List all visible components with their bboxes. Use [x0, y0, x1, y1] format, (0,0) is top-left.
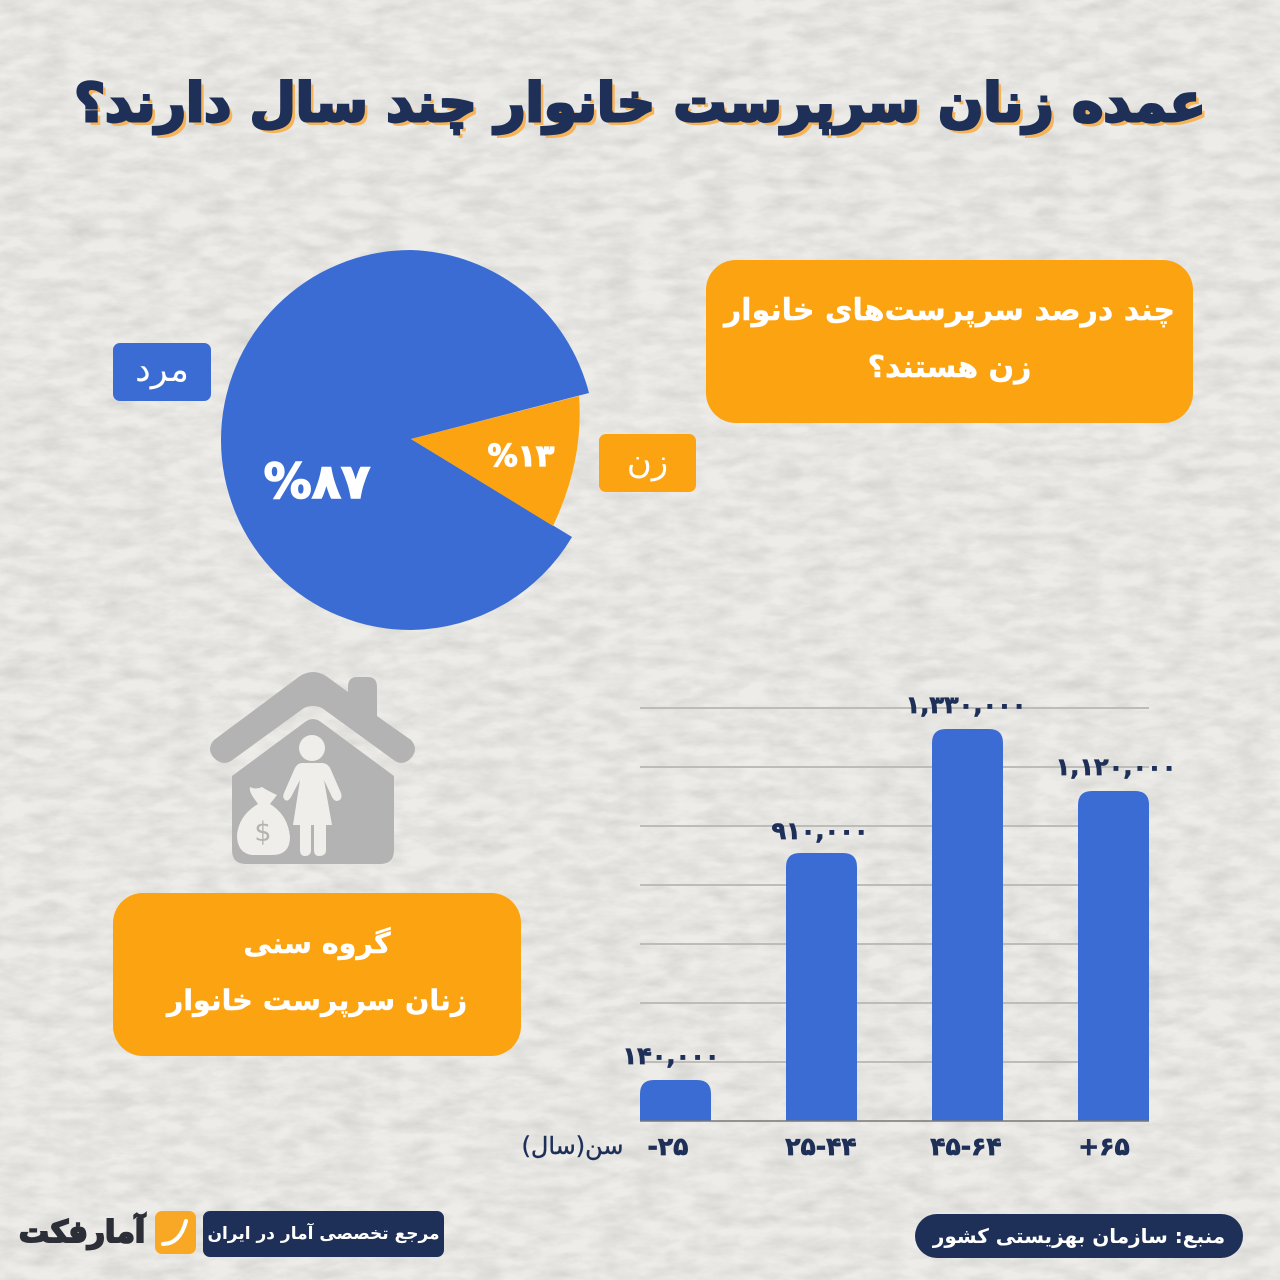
- tagline badge: مرجع تخصصی آمار در ایران: [207, 1224, 440, 1244]
- logo wordmark: آمارفکت: [19, 1215, 145, 1250]
- title: عمده زنان سرپرست خانوار چند سال دارند؟: [74, 73, 1206, 134]
- bar: 25-44: [786, 853, 857, 1121]
- bar chart: age groups: [640, 707, 1149, 1122]
- callout: age group: [113, 893, 521, 1056]
- value label: 140,000: ۱۴۰,۰۰۰: [622, 1042, 720, 1070]
- bar: 65+: [1078, 791, 1149, 1121]
- pie chart: share of household heads: [221, 250, 589, 630]
- tagline badge: [203, 1211, 444, 1257]
- source badge: [915, 1214, 1243, 1258]
- callout: share of female heads: چند درصد سرپرست‌های خانوار: [724, 292, 1175, 328]
- axis title: age in years: سن(سال): [522, 1132, 623, 1160]
- icon: house with woman and money bag: [210, 672, 415, 864]
- icon: house with woman and money bag: $: [254, 817, 272, 848]
- axis label: 25-44: ۲۵-۴۴: [785, 1132, 857, 1161]
- axis label: under 25: -۲۵: [648, 1132, 688, 1161]
- axis label: 45-64: ۴۵-۶۴: [930, 1132, 1002, 1161]
- bar: under 25: [640, 1080, 711, 1121]
- value label: 910,000: ۹۱۰,۰۰۰: [771, 817, 868, 845]
- bar: 45-64: [932, 729, 1003, 1121]
- callout: share of female heads: زن هستند؟: [868, 350, 1031, 384]
- source badge: منبع: سازمان بهزیستی کشور: [933, 1224, 1225, 1248]
- value: 13%: %۱۳: [488, 439, 554, 474]
- axis label: 65+: +۶۵: [1078, 1132, 1130, 1161]
- label: women: زن: [627, 442, 668, 482]
- slice: women 13%: [411, 396, 580, 526]
- label: men: [113, 343, 211, 401]
- slice: men 87%: [221, 250, 589, 630]
- logo: Amarfact: [19, 1211, 196, 1254]
- value label: 1,120,000: ۱,۱۲۰,۰۰۰: [1056, 753, 1176, 781]
- callout: age group: گروه سنی: [243, 926, 391, 960]
- value label: 1,330,000: ۱,۳۳۰,۰۰۰: [906, 691, 1026, 719]
- logo icon: [155, 1211, 196, 1254]
- label: men: مرد: [135, 350, 189, 390]
- value: 87%: %۸۷: [264, 454, 370, 510]
- callout: share of female heads: [706, 260, 1193, 423]
- callout: age group: زنان سرپرست خانوار: [167, 984, 467, 1016]
- label: women: [599, 434, 696, 492]
